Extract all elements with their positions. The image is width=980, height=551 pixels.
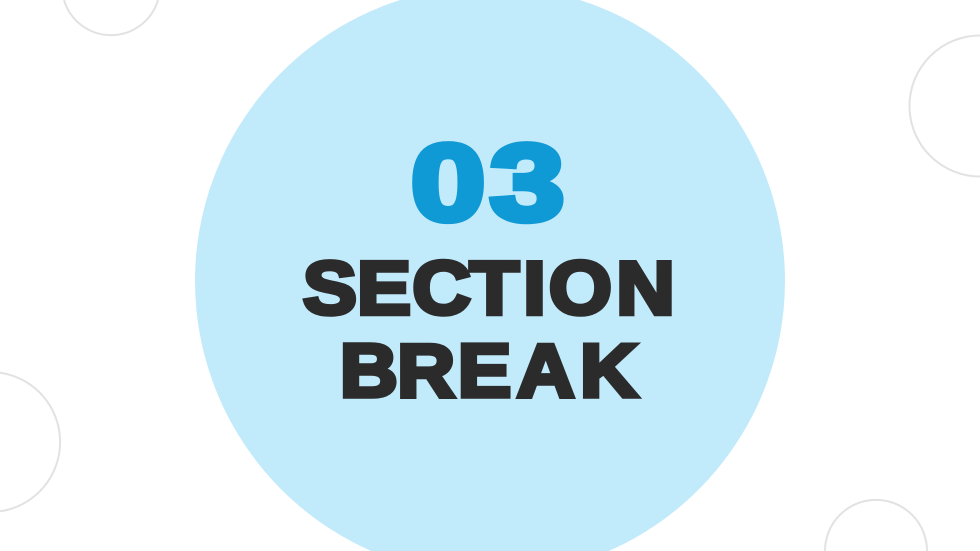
heading line 1: SECTION — [303, 246, 675, 330]
large light blue circle — [195, 0, 785, 551]
heading line 2: BREAK — [340, 330, 638, 413]
decorative ring: bottom left — [0, 373, 60, 511]
decorative ring: bottom right — [825, 500, 927, 551]
decorative ring: right — [910, 36, 980, 176]
section number: 03 — [411, 122, 564, 243]
heading — [303, 246, 675, 413]
decorative ring: top left — [64, 0, 158, 35]
